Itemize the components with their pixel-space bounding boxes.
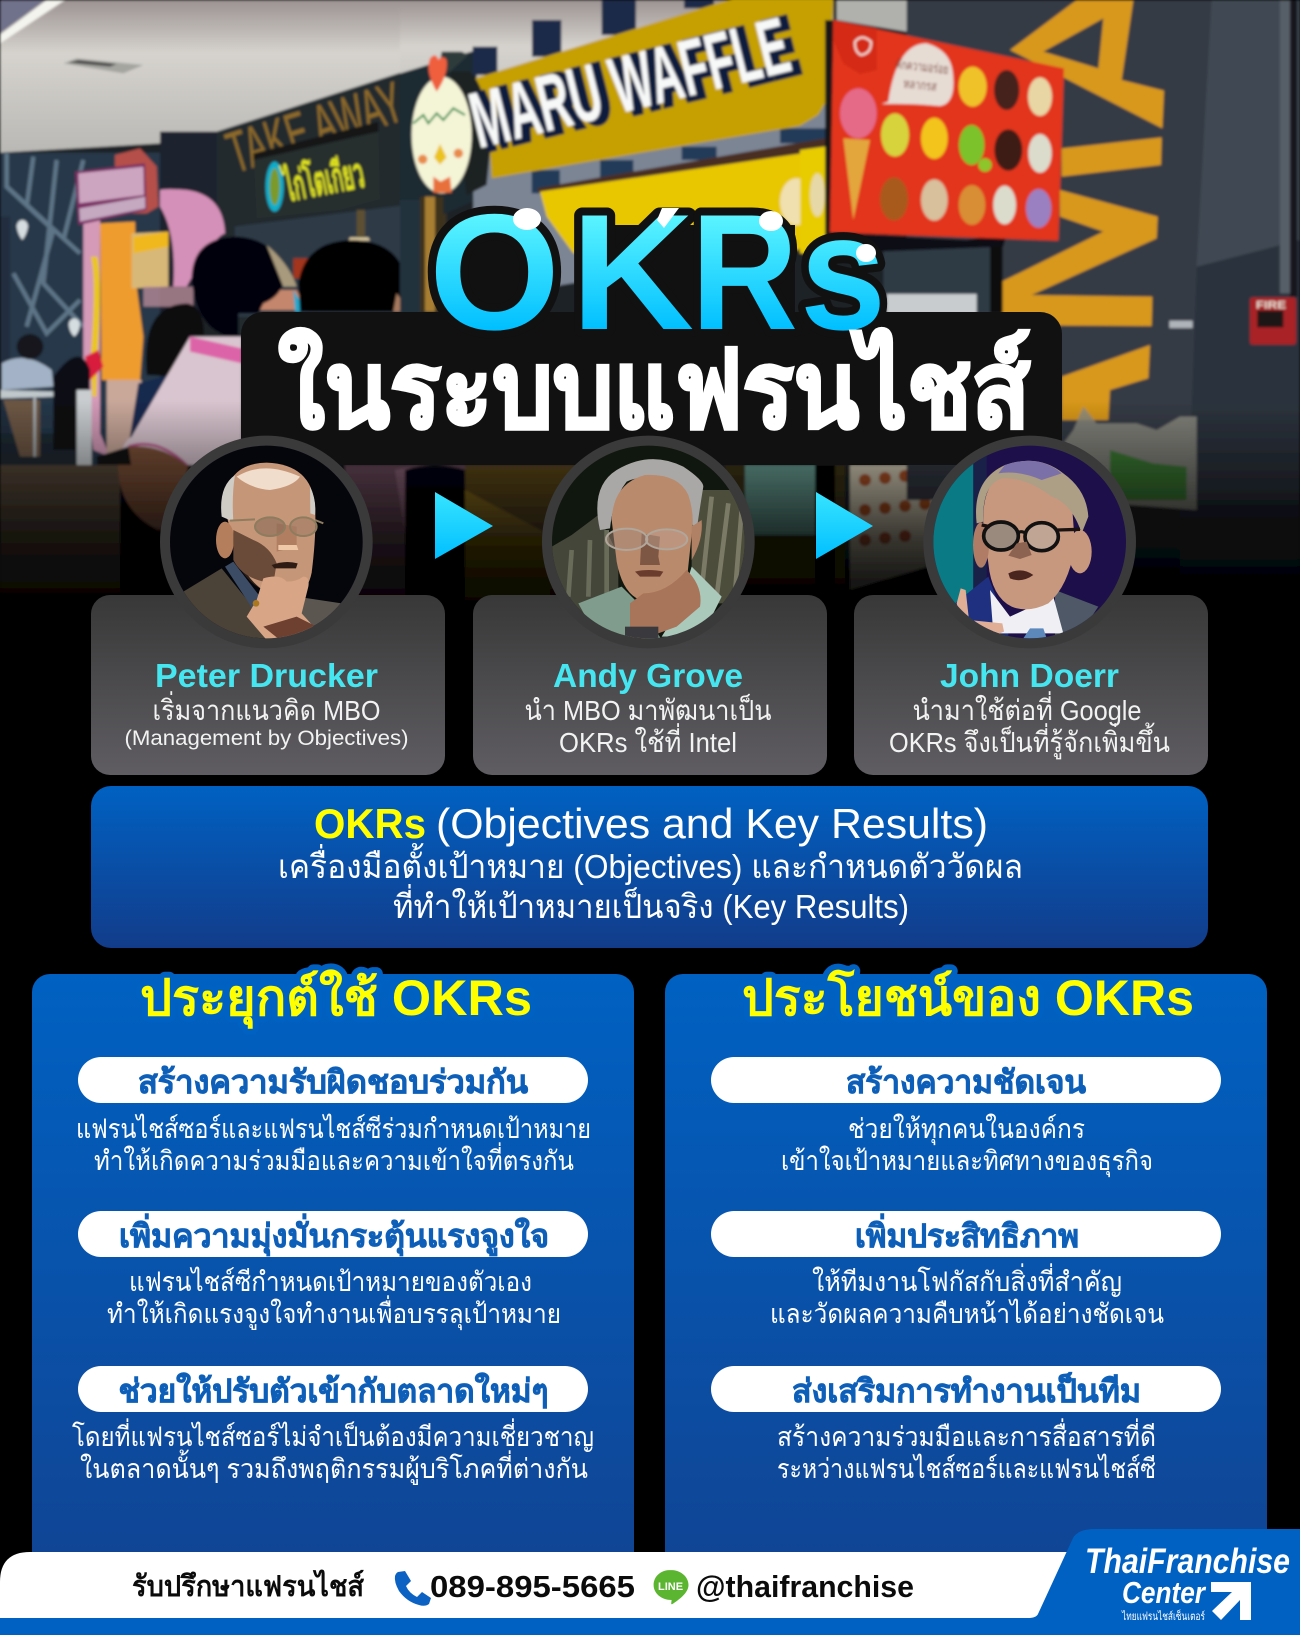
item: commitment and motivation: ทำให้เกิดแรงจูงใจทำงานเพื่อบรรลุเป้าหมาย bbox=[107, 1295, 561, 1331]
panel: john doerr: John Doerr bbox=[940, 657, 1119, 694]
item: teamwork: ระหว่างแฟรนไชส์ซอร์และแฟรนไชส์ซี bbox=[777, 1453, 1156, 1484]
footer text: phone number: 089-895-5665 bbox=[430, 1569, 635, 1604]
fire alarm label: FIRE bbox=[1256, 300, 1287, 312]
item: shared responsibility bbox=[76, 1057, 591, 1176]
portrait: peter drucker bbox=[160, 436, 373, 648]
portrait: john doerr bbox=[923, 436, 1136, 650]
item: adapt to new markets: ช่วยให้ปรับตัวเข้ากับตลาดใหม่ๆ bbox=[118, 1372, 548, 1409]
panel: peter drucker bbox=[91, 595, 445, 775]
item: teamwork bbox=[711, 1366, 1221, 1484]
item: teamwork: ส่งเสริมการทำงานเป็นทีม bbox=[792, 1371, 1141, 1409]
sign lettering: maru waffle bbox=[461, 0, 806, 168]
footer text: line handle: @thaifranchise bbox=[696, 1569, 914, 1604]
icon: phone bbox=[395, 1571, 431, 1606]
item: shared responsibility: สร้างความรับผิดชอบร่วมกัน bbox=[138, 1064, 528, 1100]
right wall bbox=[800, 0, 1300, 510]
item: teamwork: สร้างความร่วมมือและการสื่อสารที่ดี bbox=[777, 1418, 1156, 1452]
arrow: grove to doerr bbox=[816, 492, 873, 559]
title: OKRs: O bbox=[429, 180, 560, 364]
item: adapt to new markets: ในตลาดนั้นๆ รวมถึงพฤติกรรมผู้บริโภคที่ต่างกัน bbox=[80, 1449, 588, 1485]
icon: line bbox=[654, 1570, 688, 1604]
item: commitment and motivation: แฟรนไชส์ซีกำหนดเป้าหมายของตัวเอง bbox=[129, 1266, 532, 1297]
icon: logo arrow bbox=[1211, 1582, 1251, 1620]
heading: benefits of okrs: ประโยชน์ของ OKRs bbox=[742, 968, 1194, 1026]
item: efficiency: เพิ่มประสิทธิภาพ bbox=[855, 1213, 1079, 1254]
title: OKRs: R bbox=[691, 180, 798, 364]
title: in franchise system: ในระบบแฟรนไชส์ bbox=[278, 328, 1030, 450]
item: efficiency: และวัดผลความคืบหน้าได้อย่างชัดเจน bbox=[770, 1299, 1164, 1329]
title: OKRs bbox=[429, 180, 886, 364]
panel: applying okrs bbox=[32, 969, 634, 1594]
footer text: franchise consulting: รับปรึกษาแฟรนไชส์ bbox=[132, 1569, 364, 1603]
arrow: drucker to grove bbox=[435, 492, 493, 559]
item: adapt to new markets: โดยที่แฟรนไชส์ซอร์ไม่จำเป็นต้องมีความเชี่ยวชาญ bbox=[72, 1418, 594, 1452]
panel: andy grove: OKRs ใช้ที่ Intel bbox=[559, 723, 737, 758]
logo: thaifranchise center: ไทยแฟรนไชส์เซ็นเตอร์ bbox=[1121, 1609, 1205, 1623]
item: efficiency: ให้ทีมงานโฟกัสกับสิ่งที่สำคัญ bbox=[812, 1263, 1122, 1297]
item: shared responsibility: แฟรนไชส์ซอร์และแฟรนไชส์ซีร่วมกำหนดเป้าหมาย bbox=[76, 1113, 591, 1144]
heading: applying okrs: ประยุกต์ใช้ OKRs bbox=[140, 969, 532, 1029]
panel: okrs definition: (Objectives and Key Results) bbox=[436, 800, 988, 847]
item: shared responsibility: ทำให้เกิดความร่วมมือและความเข้าใจที่ตรงกัน bbox=[94, 1142, 574, 1176]
background photo: food court: ไก่โตเกียว bbox=[278, 148, 368, 211]
title panel bbox=[241, 180, 1062, 465]
panel: benefits of okrs bbox=[665, 968, 1267, 1594]
panel: peter drucker: (Management by Objectives) bbox=[124, 727, 408, 750]
panel: john doerr: OKRs จึงเป็นที่รู้จักเพิ่มขึ้น bbox=[889, 722, 1170, 760]
portrait: andy grove bbox=[542, 436, 755, 648]
panel: okrs definition bbox=[91, 786, 1208, 948]
item: clarity: เข้าใจเป้าหมายและทิศทางของธุรกิจ bbox=[781, 1145, 1153, 1178]
title: OKRs: K bbox=[571, 180, 694, 364]
panel: peter drucker: Peter Drucker bbox=[155, 657, 378, 694]
lower scene strip under title bbox=[0, 465, 1300, 605]
item: commitment and motivation bbox=[78, 1211, 588, 1331]
panel: andy grove bbox=[473, 595, 827, 775]
sign text: take away wall lettering: TAKE AWAY bbox=[219, 70, 411, 186]
item: clarity: ช่วยให้ทุกคนในองค์กร bbox=[848, 1113, 1085, 1146]
panel: okrs definition: ที่ทำให้เป้าหมายเป็นจริง (Key Results) bbox=[393, 884, 909, 925]
item: clarity: สร้างความชัดเจน bbox=[846, 1064, 1086, 1100]
panel: okrs definition: OKRs bbox=[314, 800, 426, 847]
ice cream board heading: หลากรส bbox=[903, 76, 937, 94]
panel: okrs definition: เครื่องมือตั้งเป้าหมาย (Objectives) และกำหนดตัววัดผล bbox=[278, 843, 1023, 885]
panel: john doerr bbox=[854, 595, 1208, 775]
ice cream board heading bbox=[893, 56, 949, 95]
item: commitment and motivation: เพิ่มความมุ่งมั่นกระตุ้นแรงจูงใจ bbox=[119, 1213, 549, 1257]
panel: john doerr: นำมาใช้ต่อที่ Google bbox=[912, 691, 1142, 726]
item: efficiency bbox=[711, 1211, 1221, 1329]
wall letters: away bbox=[1002, 0, 1164, 420]
item: clarity bbox=[711, 1057, 1221, 1178]
panel: andy grove: Andy Grove bbox=[553, 657, 743, 694]
title: OKRs: s bbox=[800, 180, 886, 364]
footer bar bbox=[0, 1552, 1300, 1635]
item: adapt to new markets bbox=[72, 1366, 594, 1485]
ice cream board heading: คักความอร่อย bbox=[895, 56, 949, 77]
logo: thaifranchise center bbox=[1028, 1529, 1300, 1635]
panel: andy grove: นำ MBO มาพัฒนาเป็น bbox=[524, 693, 772, 726]
icon: line: LINE bbox=[658, 1581, 683, 1593]
logo: thaifranchise center: Center bbox=[1122, 1575, 1207, 1610]
sign: maru waffle bbox=[400, 0, 833, 313]
panel: peter drucker: เริ่มจากแนวคิด MBO bbox=[152, 691, 380, 726]
